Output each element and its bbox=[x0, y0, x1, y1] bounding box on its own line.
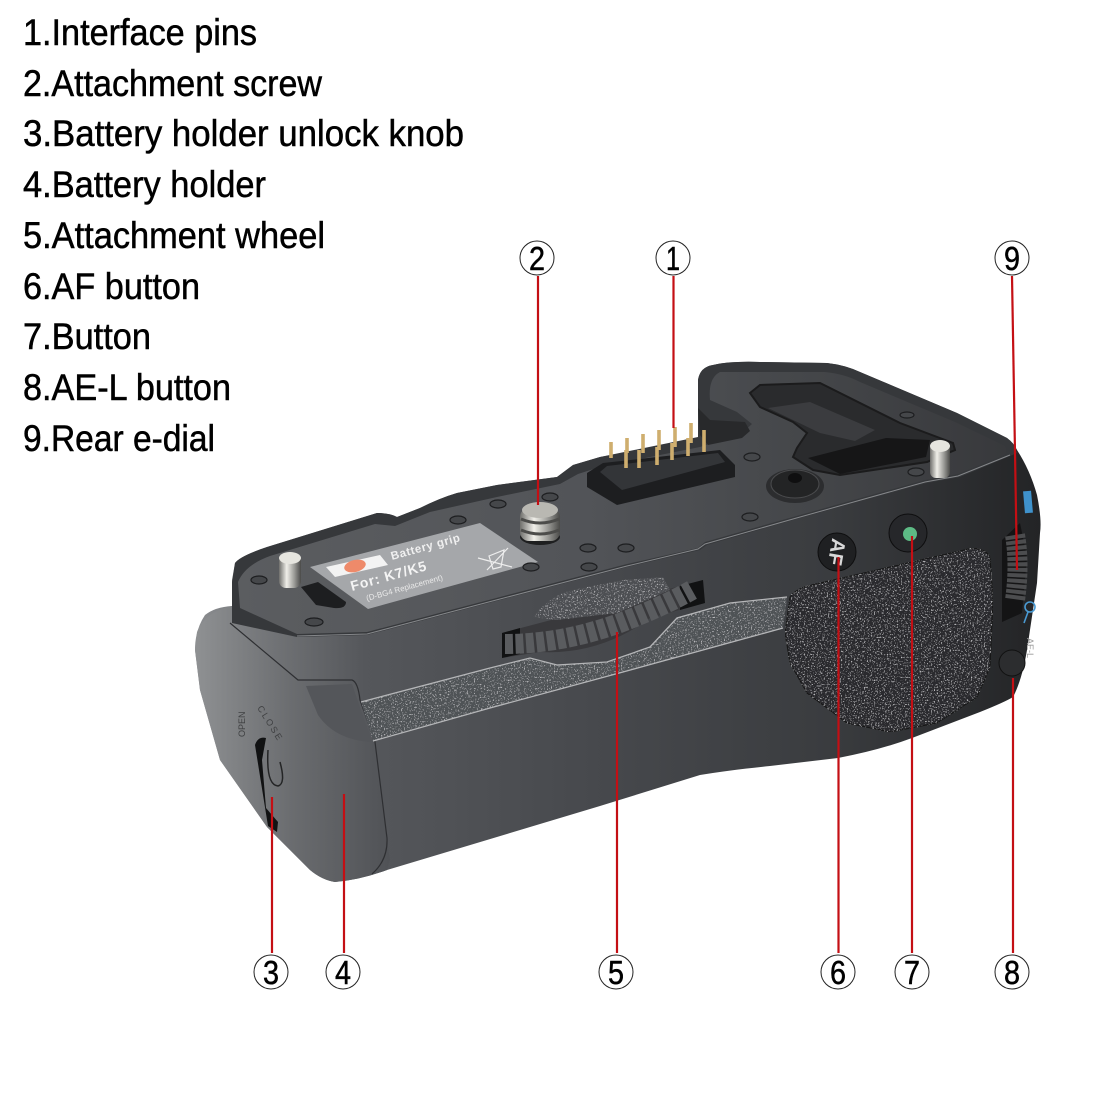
callout 3: 3 bbox=[263, 954, 279, 991]
top plate surface bbox=[238, 372, 1006, 634]
rubber grip pad bbox=[785, 548, 993, 732]
rear e-dial bbox=[1002, 523, 1027, 622]
holder text close: CLOSE bbox=[255, 704, 285, 743]
recycling mark bbox=[478, 548, 512, 570]
grip body bbox=[195, 362, 1041, 882]
textured ridge band bbox=[361, 597, 787, 741]
item 9: 9.Rear e-dial bbox=[23, 418, 215, 459]
plate notch bbox=[301, 582, 346, 608]
right guide pin bbox=[930, 440, 950, 478]
wheel slot ends bbox=[502, 580, 705, 658]
interface connector bbox=[587, 423, 735, 505]
battery cavity bbox=[750, 383, 955, 475]
item 3: 3.Battery holder unlock knob bbox=[23, 113, 464, 154]
holder text open: OPEN bbox=[237, 711, 247, 737]
item 6: 6.AF button bbox=[23, 266, 200, 307]
callout 9 bbox=[995, 240, 1029, 570]
sticker logo bbox=[326, 555, 388, 577]
unlock knob bbox=[255, 738, 283, 832]
battery holder cap bbox=[195, 606, 390, 882]
top plate rim bbox=[232, 362, 1017, 637]
sticker title: Battery grip bbox=[390, 532, 462, 563]
blue mode icon bbox=[1023, 491, 1033, 513]
item 8: 8.AE-L button bbox=[23, 367, 231, 408]
callout 6: 6 bbox=[830, 954, 846, 991]
blue magnifier icon bbox=[1024, 602, 1035, 623]
callout 3 bbox=[254, 797, 288, 991]
holder seam bbox=[230, 623, 387, 874]
callout 5 bbox=[599, 632, 633, 991]
callout 7 bbox=[895, 536, 929, 991]
callout 4 bbox=[326, 794, 360, 991]
wheel slot bbox=[502, 580, 705, 658]
AE-L marking: AE-L bbox=[1025, 638, 1035, 658]
attachment screw bbox=[520, 502, 560, 545]
attachment wheel bbox=[505, 590, 692, 644]
callout 2 bbox=[520, 240, 554, 505]
callout 1 bbox=[656, 240, 690, 428]
battery grip product illustration bbox=[195, 362, 1041, 882]
callout 5: 5 bbox=[608, 954, 624, 991]
label sticker bbox=[310, 523, 538, 609]
rubber foot bbox=[766, 469, 824, 503]
AF button: AF bbox=[823, 537, 849, 567]
item 7: 7.Button bbox=[23, 316, 151, 357]
callout 6 bbox=[821, 557, 855, 991]
item 4: 4.Battery holder bbox=[23, 164, 266, 205]
callout 9: 9 bbox=[1004, 240, 1020, 277]
plate screws bbox=[251, 412, 924, 626]
AE-L button bbox=[999, 650, 1025, 676]
callout 2: 2 bbox=[529, 240, 545, 277]
callout 8 bbox=[995, 678, 1029, 991]
sticker note: (D-BG4 Replacement) bbox=[365, 573, 444, 603]
parts list bbox=[23, 12, 464, 459]
sticker model: For: K7/K5 bbox=[349, 557, 429, 594]
interface pins bbox=[611, 423, 704, 468]
callout 7: 7 bbox=[904, 954, 920, 991]
raised lobe behind pins bbox=[698, 408, 750, 445]
callout 8: 8 bbox=[1004, 954, 1020, 991]
callout 1: 1 bbox=[666, 240, 680, 277]
green button bbox=[889, 514, 927, 552]
left guide pin bbox=[279, 552, 301, 588]
wheel hump bbox=[533, 577, 670, 620]
item 2: 2.Attachment screw bbox=[23, 63, 322, 104]
callout 4: 4 bbox=[335, 954, 351, 991]
item 1: 1.Interface pins bbox=[23, 12, 257, 53]
item 5: 5.Attachment wheel bbox=[23, 215, 325, 256]
plate edge highlight bbox=[297, 455, 1010, 636]
AF button bbox=[818, 533, 856, 571]
